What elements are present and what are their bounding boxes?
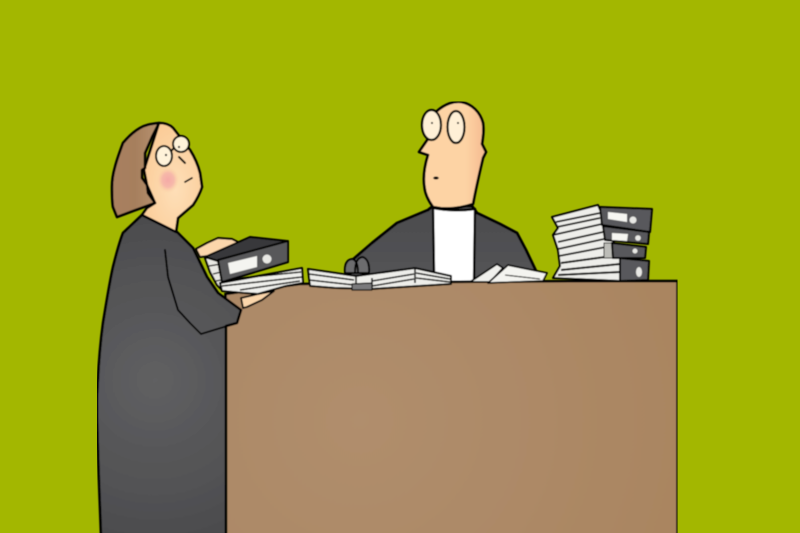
binder labels	[608, 212, 628, 241]
desk	[226, 281, 678, 533]
binder base bar	[352, 283, 372, 290]
binder rings	[345, 257, 369, 273]
held paper stack	[220, 268, 303, 294]
woman robe	[97, 215, 241, 533]
open binder pages	[308, 268, 451, 289]
binder four	[620, 258, 649, 281]
stack grey spine	[604, 243, 613, 258]
woman pupil right	[178, 146, 180, 148]
woman upper hand	[196, 238, 241, 257]
binder holes	[630, 216, 642, 277]
stack pages	[552, 205, 622, 281]
judge mouth	[433, 176, 439, 180]
woman sleeve line	[165, 250, 237, 334]
held binder label	[228, 256, 257, 274]
loose papers on desk	[470, 264, 547, 283]
right binder stack	[552, 205, 652, 281]
held binder	[205, 237, 288, 282]
binder three	[612, 243, 646, 258]
woman lower hand	[241, 291, 274, 308]
binder held by woman	[205, 237, 303, 294]
judge left eye glass	[422, 110, 441, 140]
judge robe	[350, 206, 538, 284]
judge pupil left	[431, 122, 433, 124]
binder two	[603, 226, 649, 244]
woman head	[142, 123, 202, 232]
judge pupil right	[457, 122, 459, 124]
woman figure	[97, 123, 274, 533]
woman cheek blush	[157, 167, 179, 193]
judge head	[419, 102, 486, 208]
judge white bib	[433, 208, 475, 284]
woman pupils	[165, 154, 167, 156]
held left pages	[205, 256, 222, 290]
woman hair	[112, 123, 159, 217]
woman mouth	[185, 178, 192, 182]
judge right eye glass	[448, 111, 464, 143]
artwork	[97, 102, 678, 533]
judge figure	[350, 102, 538, 284]
woman glasses	[156, 136, 189, 166]
held binder ring	[262, 254, 272, 264]
open binder on desk	[308, 257, 451, 290]
binder one	[600, 207, 652, 232]
